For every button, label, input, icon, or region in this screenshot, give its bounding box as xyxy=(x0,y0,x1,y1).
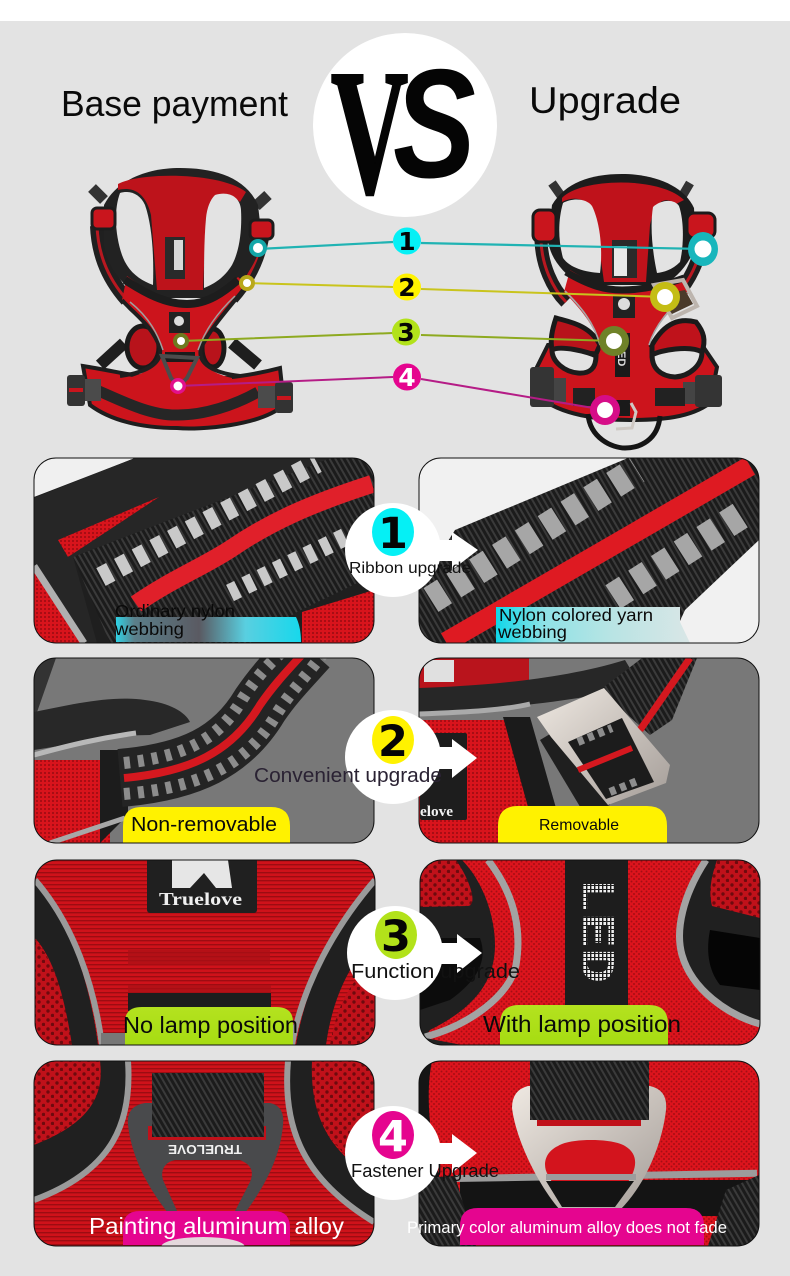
label: nylon colored yarn webbing xyxy=(496,605,690,643)
connector 2: buckle xyxy=(239,273,680,312)
badge 4: fastener upgrade: Fastener Upgrade xyxy=(351,1161,499,1181)
label: ordinary nylon webbing: webbing xyxy=(114,619,184,639)
badge 2: convenient upgrade xyxy=(254,710,477,804)
panel: painting aluminum alloy xyxy=(34,1061,374,1257)
connector 3: lamp: 3 xyxy=(397,318,415,347)
connector 4: fastener xyxy=(170,363,620,425)
panel: ordinary webbing xyxy=(34,458,374,643)
arrow 3 xyxy=(435,934,482,973)
heading: Base payment: Base payment xyxy=(61,83,288,124)
label: removable xyxy=(498,806,667,843)
panel: no lamp position xyxy=(35,856,375,1045)
panel: removable strap: elove xyxy=(420,804,453,820)
label: non-removable xyxy=(123,807,290,843)
connector 1: ribbon: 1 xyxy=(398,227,416,256)
panel: removable strap xyxy=(419,658,759,843)
right harness xyxy=(530,174,722,448)
arrow 2 xyxy=(430,739,477,778)
badge 3: function upgrade: 3 xyxy=(381,912,411,962)
left harness xyxy=(67,168,293,428)
arrow 1 xyxy=(430,532,478,570)
label: no lamp position xyxy=(123,1007,298,1045)
icon: Truelove logo tag xyxy=(147,856,257,913)
connector 2: buckle: 2 xyxy=(398,273,416,302)
badge 1: ribbon upgrade xyxy=(345,503,478,597)
label: primary color aluminum alloy does not fade xyxy=(407,1208,727,1245)
label: ordinary nylon webbing: Ordinary nylon xyxy=(115,601,235,621)
panel: non-removable strap xyxy=(34,645,374,843)
label: removable: Removable xyxy=(539,817,619,834)
label: no lamp position: No lamp position xyxy=(123,1012,298,1038)
panel: primary color aluminum alloy xyxy=(419,1061,760,1246)
icon: silver aluminum ring xyxy=(512,1061,666,1210)
label: with lamp position: With lamp position xyxy=(483,1011,681,1037)
icon: dark painted aluminum ring: TRUELOVE xyxy=(168,1142,242,1157)
label: nylon colored yarn webbing: webbing xyxy=(497,622,567,642)
badge 1: ribbon upgrade: Ribbon upgrade xyxy=(349,560,471,577)
right harness: ED xyxy=(615,351,627,366)
VS badge xyxy=(313,33,497,231)
arrow 4 xyxy=(430,1134,477,1173)
panel: with lamp position xyxy=(420,860,760,1045)
label: nylon colored yarn webbing: Nylon colored yarn xyxy=(499,605,653,625)
connector 1: ribbon xyxy=(249,227,718,266)
heading: Upgrade: Upgrade xyxy=(529,80,681,121)
badge 4: fastener upgrade: 4 xyxy=(378,1112,408,1162)
VS badge: V xyxy=(331,33,408,231)
VS badge: S xyxy=(393,37,476,210)
badge 3: function upgrade xyxy=(347,906,520,1000)
icon: Truelove logo tag: Truelove xyxy=(159,889,242,909)
connector 4: fastener: 4 xyxy=(398,363,416,392)
badge 3: function upgrade: Function upgrade xyxy=(351,961,520,983)
label: with lamp position xyxy=(483,1005,681,1045)
panel: colored yarn webbing xyxy=(419,458,759,643)
badge 2: convenient upgrade: 2 xyxy=(378,717,408,767)
icon: dark painted aluminum ring xyxy=(128,1073,283,1213)
badge 2: convenient upgrade: Convenient upgrade xyxy=(254,765,442,787)
label: non-removable: Non-removable xyxy=(131,814,277,836)
label: painting aluminum alloy: Painting aluminum alloy xyxy=(89,1213,345,1239)
label: primary color aluminum alloy does not fade: Primary color aluminum alloy does not fade xyxy=(407,1219,727,1237)
connector 3: lamp xyxy=(173,318,629,356)
badge 4: fastener upgrade xyxy=(345,1106,499,1200)
label: ordinary nylon webbing xyxy=(114,601,301,642)
badge 1: ribbon upgrade: 1 xyxy=(378,509,408,559)
label: LED lettering on strap: LED xyxy=(567,878,621,983)
